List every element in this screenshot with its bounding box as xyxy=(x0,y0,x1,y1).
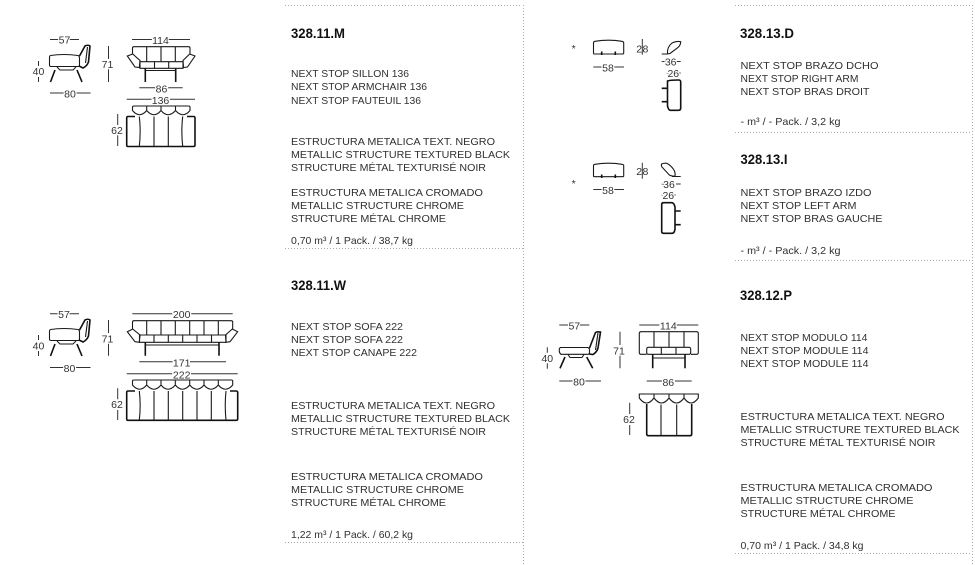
front view dimensions: 71 xyxy=(102,334,113,346)
front view sofa xyxy=(127,321,238,356)
finish: chrome: METALLIC STRUCTURE CHROME xyxy=(291,484,464,496)
side view dimensions xyxy=(541,320,601,388)
front view dimensions: 114 xyxy=(152,35,169,47)
front and top view dimensions: 114 xyxy=(660,320,677,332)
product names: NEXT STOP RIGHT ARM xyxy=(740,73,858,85)
panel: 328.11.W drawings xyxy=(33,309,238,420)
side view chair xyxy=(559,332,600,368)
packaging data: - m³ / - Pack. / 3,2 kg xyxy=(740,245,841,257)
panel: 328.13.I drawings xyxy=(572,163,681,233)
panel: 328.11.M text xyxy=(291,25,510,247)
top view module xyxy=(639,394,698,436)
dimensions: 58 xyxy=(602,185,614,197)
finish: textured black: STRUCTURE MÉTAL TEXTURISÉ NOIR xyxy=(291,425,486,438)
top view sofa xyxy=(127,380,238,420)
front view sofa xyxy=(127,47,195,82)
finish: chrome: ESTRUCTURA METALICA CROMADO xyxy=(291,471,483,483)
front view dimensions: 171 xyxy=(173,358,191,370)
finish: chrome xyxy=(291,471,483,509)
dimensions: 58 xyxy=(602,62,614,74)
product names xyxy=(291,321,417,359)
dimensions: 36 xyxy=(663,179,675,191)
product names: NEXT STOP CANAPE 222 xyxy=(291,347,417,359)
product names xyxy=(291,68,427,107)
side view dimensions: 40 xyxy=(33,340,44,352)
side view dimensions xyxy=(33,34,90,100)
product names: NEXT STOP MODULE 114 xyxy=(740,345,869,357)
finish: chrome: STRUCTURE MÉTAL CHROME xyxy=(740,507,896,520)
finish: chrome: ESTRUCTURA METALICA CROMADO xyxy=(740,482,932,494)
heading: 328.13.I xyxy=(740,151,788,167)
finish: textured black: ESTRUCTURA METALICA TEXT. NEGRO xyxy=(291,400,495,412)
front view dimensions: 86 xyxy=(156,84,167,96)
front and top view dimensions: 71 xyxy=(613,346,625,358)
side view armchair xyxy=(50,45,90,82)
heading: 328.11.W xyxy=(291,277,347,293)
dimensions: 36 xyxy=(665,56,677,68)
dimensions xyxy=(593,39,681,80)
product names: NEXT STOP SOFA 222 xyxy=(291,334,403,346)
front view dimensions: 136 xyxy=(152,95,169,107)
side view arm xyxy=(661,163,681,176)
product names: NEXT STOP LEFT ARM xyxy=(740,200,856,212)
product names: NEXT STOP BRAS DROIT xyxy=(740,86,870,98)
packaging data: - m³ / - Pack. / 3,2 kg xyxy=(740,116,841,128)
front and top view dimensions xyxy=(613,320,698,435)
finish: textured black xyxy=(291,400,510,438)
top view sofa xyxy=(127,106,195,146)
heading: 328.11.M xyxy=(291,25,345,41)
finish: textured black: STRUCTURE MÉTAL TEXTURISÉ NOIR xyxy=(740,436,936,449)
finish: textured black: METALLIC STRUCTURE TEXTURED BLACK xyxy=(291,413,510,425)
side view dimensions: 80 xyxy=(64,363,75,375)
side view arm xyxy=(662,41,681,54)
product names xyxy=(740,187,882,225)
finish: textured black: ESTRUCTURA METALICA TEXT. NEGRO xyxy=(291,136,495,148)
side view dimensions: 80 xyxy=(573,376,585,388)
product names: NEXT STOP BRAZO IZDO xyxy=(740,187,872,199)
front and top view dimensions: 62 xyxy=(623,414,635,426)
top view arm xyxy=(662,203,681,233)
side view dimensions: 40 xyxy=(541,353,553,365)
panel: 328.13.I text xyxy=(740,151,882,257)
panel: 328.13.D text xyxy=(740,25,878,128)
finish: chrome: METALLIC STRUCTURE CHROME xyxy=(740,495,914,507)
front view dimensions: 62 xyxy=(111,399,123,411)
finish: textured black xyxy=(291,136,510,174)
dimensions: 28 xyxy=(636,166,648,178)
side view dimensions xyxy=(33,309,90,375)
packaging data: 0,70 m³ / 1 Pack. / 38,7 kg xyxy=(291,235,413,247)
panel: 328.11.M drawings xyxy=(33,34,195,146)
panel: 328.12.P text xyxy=(740,287,960,552)
finish: textured black: METALLIC STRUCTURE TEXTURED BLACK xyxy=(291,149,510,161)
product names: NEXT STOP SOFA 222 xyxy=(291,321,403,333)
dimensions: 28 xyxy=(636,44,648,56)
front view dimensions: 62 xyxy=(111,125,123,137)
heading: 328.13.D xyxy=(740,25,794,41)
front view module xyxy=(639,332,698,368)
front view dimensions xyxy=(102,35,195,146)
product names: NEXT STOP ARMCHAIR 136 xyxy=(291,81,427,93)
finish: chrome xyxy=(291,187,483,225)
panel: 328.11.W text xyxy=(291,277,510,541)
finish: chrome: STRUCTURE MÉTAL CHROME xyxy=(291,496,446,509)
dimensions: 26 xyxy=(667,68,679,80)
finish: chrome xyxy=(740,482,932,520)
finish: textured black: ESTRUCTURA METALICA TEXT. NEGRO xyxy=(740,411,944,423)
side view dimensions: 80 xyxy=(64,88,76,100)
product names xyxy=(740,60,878,98)
product names: NEXT STOP SILLON 136 xyxy=(291,68,409,80)
panel: 328.13.D drawings xyxy=(572,39,681,110)
side view dimensions: 57 xyxy=(568,320,580,332)
finish: textured black xyxy=(740,411,960,449)
side view dimensions: 57 xyxy=(59,34,70,46)
side view armchair xyxy=(50,319,90,356)
top view arm xyxy=(662,80,681,110)
asterisk: * xyxy=(572,43,576,55)
panel: 328.12.P drawings xyxy=(541,320,698,436)
finish: chrome: ESTRUCTURA METALICA CROMADO xyxy=(291,187,483,199)
finish: textured black: STRUCTURE MÉTAL TEXTURISÉ NOIR xyxy=(291,161,486,174)
dimensions xyxy=(593,163,681,202)
product names: NEXT STOP BRAS GAUCHE xyxy=(740,213,882,225)
product names: NEXT STOP FAUTEUIL 136 xyxy=(291,95,421,107)
heading: 328.12.P xyxy=(740,287,792,303)
front and top view dimensions: 86 xyxy=(662,377,674,389)
front view dimensions xyxy=(102,309,238,420)
finish: chrome: METALLIC STRUCTURE CHROME xyxy=(291,200,464,212)
front view dimensions: 222 xyxy=(173,370,191,382)
side view dimensions: 40 xyxy=(33,66,44,78)
dimensions: 26 xyxy=(662,190,674,202)
product names: NEXT STOP MODULE 114 xyxy=(740,358,869,370)
finish: chrome: STRUCTURE MÉTAL CHROME xyxy=(291,212,446,225)
finish: textured black: METALLIC STRUCTURE TEXTURED BLACK xyxy=(740,424,960,436)
front view dimensions: 200 xyxy=(173,309,191,321)
asterisk: * xyxy=(572,178,576,190)
product names xyxy=(740,332,869,370)
front view arm xyxy=(594,163,624,178)
side view dimensions: 57 xyxy=(58,309,70,321)
product names: NEXT STOP MODULO 114 xyxy=(740,332,868,344)
front view dimensions: 71 xyxy=(102,59,113,71)
packaging data: 1,22 m³ / 1 Pack. / 60,2 kg xyxy=(291,529,413,541)
packaging data: 0,70 m³ / 1 Pack. / 34,8 kg xyxy=(740,540,864,552)
front view arm xyxy=(594,40,624,55)
product names: NEXT STOP BRAZO DCHO xyxy=(740,60,878,72)
